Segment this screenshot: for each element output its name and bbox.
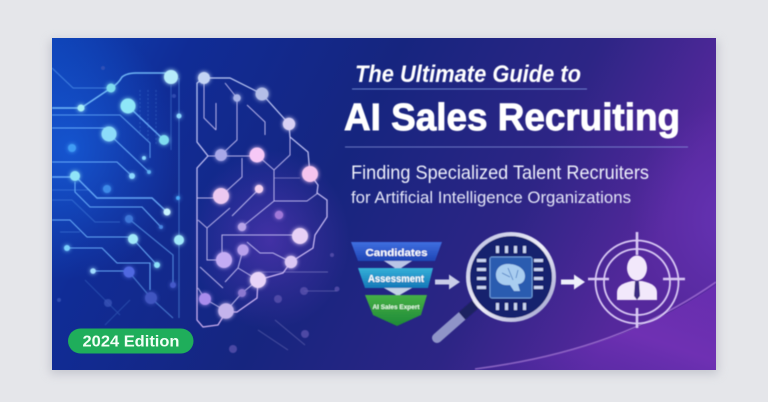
icon: target with person bbox=[588, 232, 685, 328]
subtitle text: for Artificial Intelligence Organizations bbox=[351, 188, 631, 207]
panel: banner bbox=[52, 38, 716, 370]
badge: 2024 Edition: 2024 Edition bbox=[82, 334, 180, 350]
title: AI Sales Recruiting: AI Sales Recruiting bbox=[344, 97, 680, 139]
person silhouette bbox=[617, 256, 657, 300]
funnel: candidate stages bbox=[351, 242, 442, 326]
subtitle text: Finding Specialized Talent Recruiters bbox=[351, 162, 649, 184]
icon: magnifier with AI chip bbox=[437, 234, 554, 338]
badge: 2024 Edition bbox=[68, 328, 194, 354]
funnel stage: AI Sales Expert: AI Sales Expert bbox=[372, 304, 420, 311]
funnel stage: Assessment: Assessment bbox=[368, 274, 425, 285]
funnel stage: Candidates: Candidates bbox=[366, 247, 428, 259]
card shadow bbox=[50, 40, 718, 374]
brain: right circuit half bbox=[197, 72, 340, 353]
brain: left circuit half bbox=[52, 66, 184, 325]
arrow: magnifier to target bbox=[561, 274, 585, 290]
heading: The Ultimate Guide to: The Ultimate Guide to bbox=[355, 61, 581, 88]
subtitle text bbox=[351, 162, 649, 207]
arrow: funnel to magnifier bbox=[435, 274, 460, 290]
